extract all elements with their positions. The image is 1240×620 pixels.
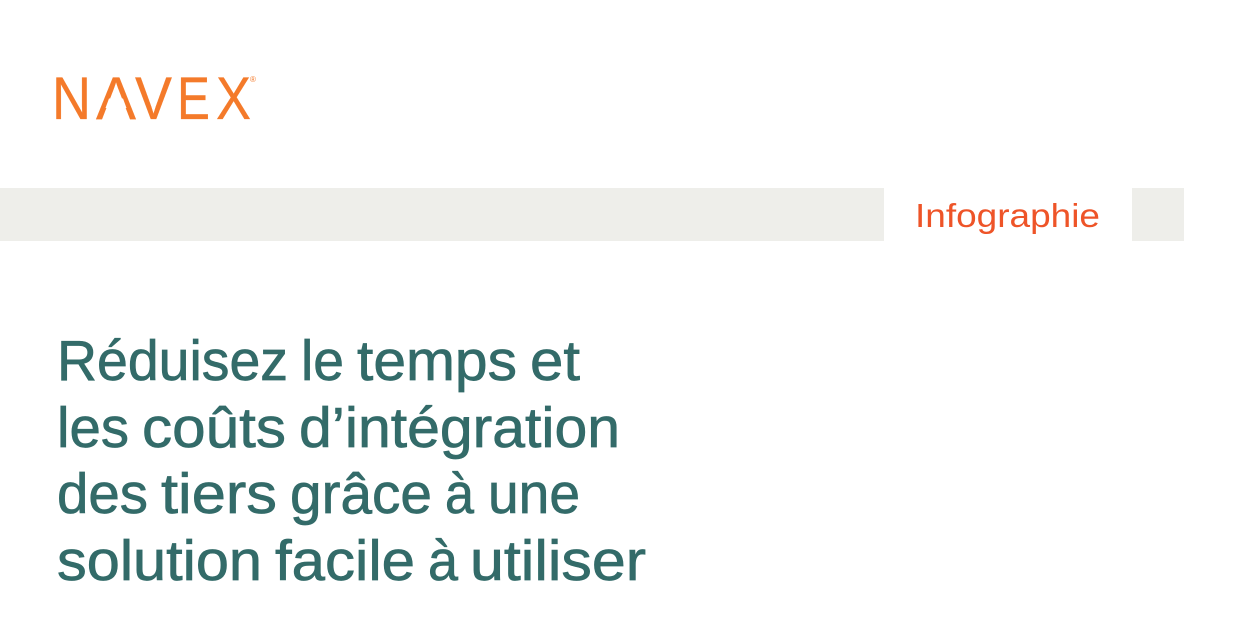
logo: NAVEX: X <box>216 65 251 132</box>
title <box>57 329 646 593</box>
logo: NAVEX: ® <box>250 75 256 84</box>
label: Infographie: Infographie <box>915 197 1100 234</box>
logo: NAVEX: N <box>52 65 91 132</box>
title: solution <box>57 529 262 593</box>
band: right grey block <box>1132 188 1184 241</box>
title: les <box>57 396 129 460</box>
title: à <box>445 462 474 526</box>
title: grâce <box>290 462 432 526</box>
title: le <box>301 329 344 393</box>
title: facile <box>275 529 415 593</box>
title: une <box>488 462 580 526</box>
title: d’intégration <box>299 396 620 460</box>
title: utiliser <box>470 529 646 593</box>
logo: NAVEX: E <box>177 65 210 132</box>
logo: NAVEX: V <box>135 65 172 132</box>
title: à <box>428 529 458 593</box>
title: tiers <box>161 462 277 526</box>
logo: NAVEX <box>52 65 256 132</box>
title: des <box>57 462 148 526</box>
title: temps <box>357 329 517 393</box>
band: left grey bar <box>0 188 884 241</box>
title: et <box>530 329 580 393</box>
title: Réduisez <box>57 329 288 393</box>
title: coûts <box>142 396 286 460</box>
logo: NAVEX: A <box>96 65 136 132</box>
